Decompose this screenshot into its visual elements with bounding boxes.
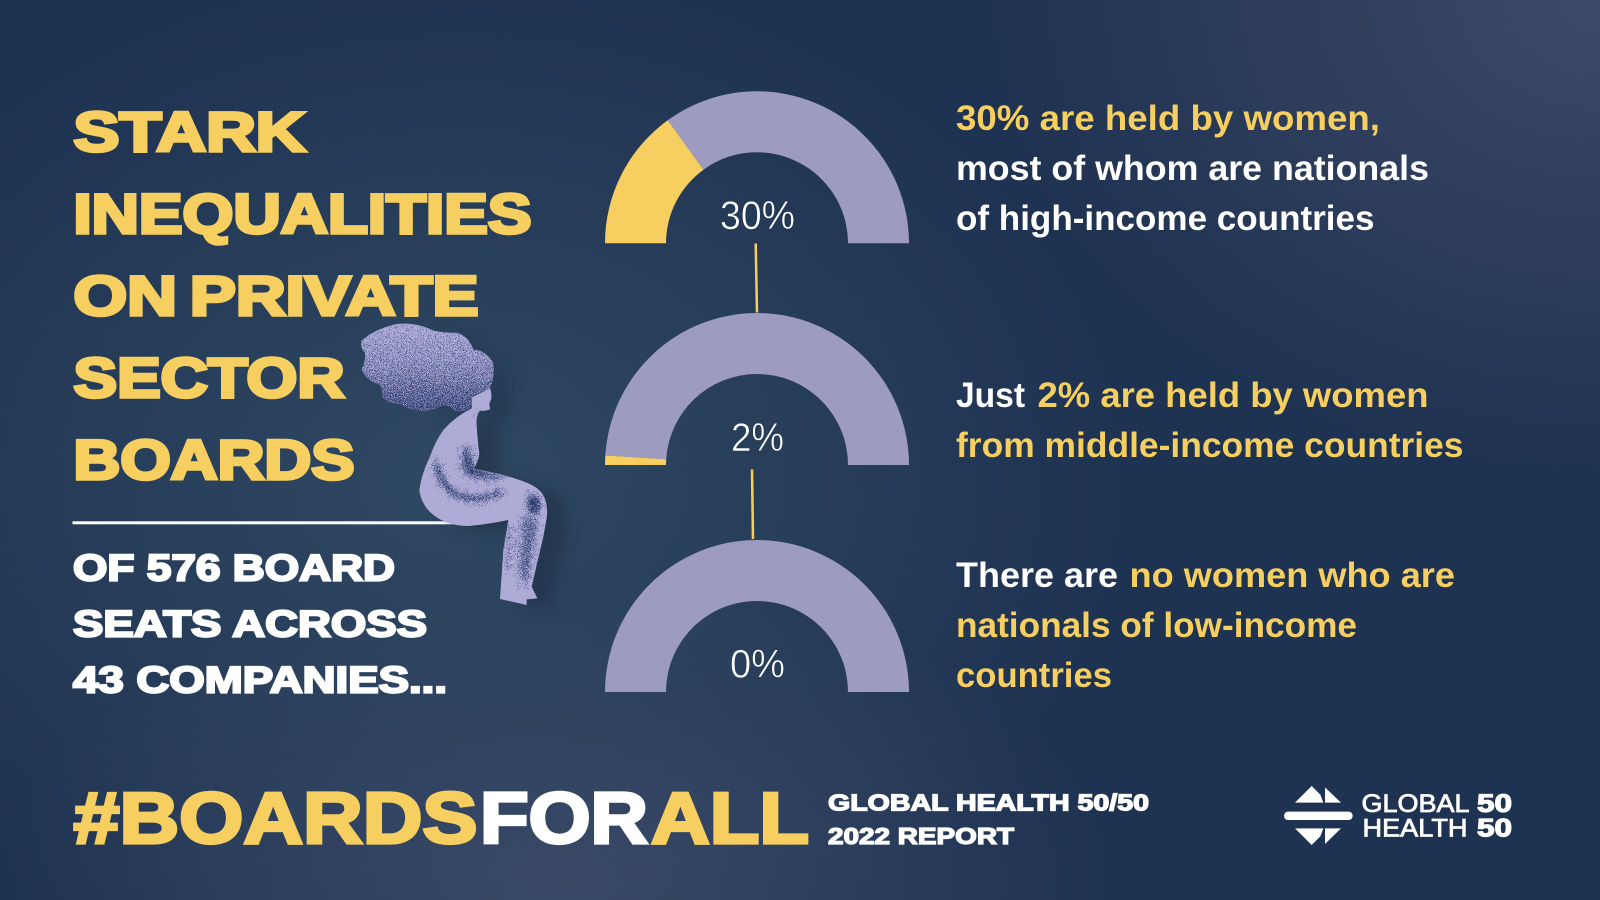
body stipple shading: [436, 410, 542, 593]
text block: high-income: [956, 99, 1429, 238]
line 3: of high-income countries: [956, 199, 1374, 238]
highlight line 1: 2% are held by women: [1038, 376, 1428, 415]
logo: Global Health 50/50: [1284, 786, 1512, 845]
gauge track: [605, 313, 909, 465]
title line: boards: BOARDS: [74, 429, 354, 491]
line 2: most of whom are nationals: [956, 149, 1429, 188]
highlight line 1: no women who are: [1130, 556, 1455, 595]
subtitle: [73, 548, 447, 700]
wordmark global: GLOBAL: [1362, 790, 1470, 818]
hashtag part: boards: #BOARDS: [74, 779, 478, 859]
hashtag part: all: ALL: [651, 779, 809, 859]
wordmark 50 bottom: 50: [1477, 814, 1512, 842]
wordmark 50 top: 50: [1477, 790, 1512, 818]
lead words: There are: [956, 556, 1118, 595]
text block: low-income: [956, 556, 1455, 695]
highlight line 3: countries: [956, 656, 1112, 695]
gauge chart 2: 2%: [605, 313, 909, 465]
title: [74, 101, 532, 491]
credit line 2: 2022 REPORT: [828, 823, 1014, 849]
subtitle line 2: SEATS ACROSS: [73, 604, 427, 644]
gauge label: 2%: [731, 416, 784, 460]
wordmark health: HEALTH: [1362, 814, 1468, 842]
gauge value: [605, 120, 704, 243]
divider ledge: [72, 521, 458, 524]
credit line 1: GLOBAL HEALTH 50/50: [828, 789, 1149, 815]
title line: on private: ON PRIVATE: [74, 265, 478, 327]
title line: sector: SECTOR: [74, 347, 344, 409]
figure shadow: [437, 334, 568, 606]
connector 2: [752, 470, 753, 539]
hashtag: [74, 779, 809, 859]
logo mark: [1284, 786, 1353, 845]
gauge chart 3: 0%: [605, 540, 909, 692]
logo wordmark: [1362, 790, 1512, 842]
highlight line 2: nationals of low-income: [956, 606, 1357, 645]
connector 1: [756, 244, 757, 312]
hair: [361, 324, 494, 411]
lead word: Just: [956, 376, 1025, 415]
subtitle line 3: 43 COMPANIES...: [73, 660, 447, 700]
gauge track: [668, 91, 909, 243]
gauge label: 0%: [730, 642, 785, 686]
body: [419, 388, 547, 605]
subtitle line 1: OF 576 BOARD: [73, 548, 395, 588]
gauge label: 30%: [720, 194, 795, 238]
title line: stark: STARK: [74, 101, 306, 163]
gauge track: [605, 540, 909, 692]
gauge chart 1: 30%: [605, 91, 909, 243]
highlight line: 30% are held by women,: [956, 99, 1380, 138]
text block: middle-income: [956, 376, 1464, 465]
illustration: seated woman with flowing hair: [361, 324, 568, 606]
title line: inequalities: INEQUALITIES: [74, 183, 532, 245]
gauge value: [605, 456, 666, 465]
highlight line 2: from middle-income countries: [956, 426, 1464, 465]
hashtag part: for: FOR: [480, 779, 648, 859]
report credit: [828, 789, 1149, 849]
